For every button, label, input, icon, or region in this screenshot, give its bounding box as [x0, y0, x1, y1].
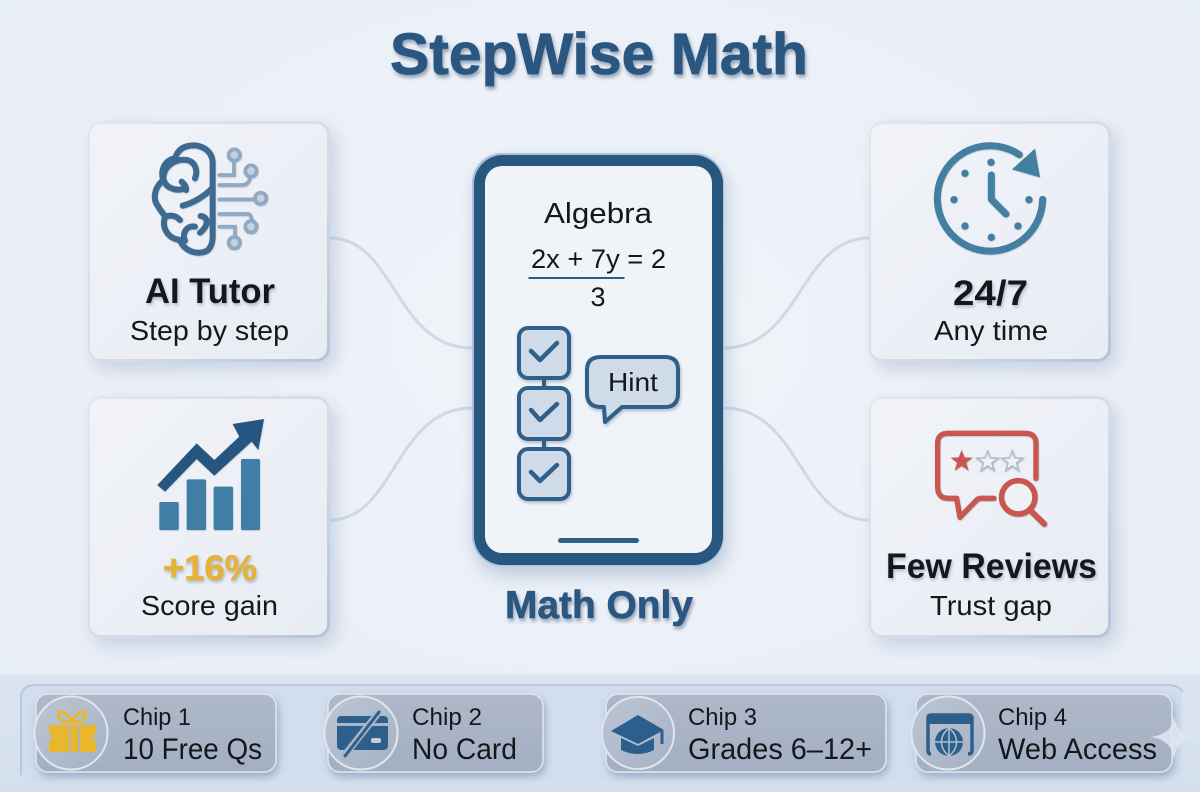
- home bar: [558, 538, 639, 543]
- heading: Few Reviews: Few Reviews: [886, 547, 1097, 586]
- title: StepWise Math: [390, 22, 808, 87]
- panel: AI Tutor: [88, 121, 330, 362]
- text: Step by step: Step by step: [130, 315, 289, 346]
- text: Chip 2: Chip 2: [412, 704, 482, 731]
- icon: review bubble with magnifier: [938, 433, 1044, 524]
- footer band: [0, 672, 1200, 792]
- callout: Hint: Hint: [608, 367, 659, 397]
- icon: graduation cap: [611, 715, 664, 754]
- stat: +16%: +16%: [163, 549, 257, 588]
- text: Chip 1: Chip 1: [123, 704, 191, 731]
- formula: 3: [590, 282, 606, 312]
- formula: [528, 244, 666, 312]
- text: 10 Free Qs: 10 Free Qs: [123, 733, 262, 766]
- label: Math Only: Math Only: [505, 584, 693, 627]
- chip 4: web access: [912, 694, 1172, 772]
- text: Trust gap: Trust gap: [930, 590, 1052, 621]
- heading: Algebra: Algebra: [544, 198, 653, 230]
- text: No Card: No Card: [412, 733, 517, 766]
- heading: AI Tutor: AI Tutor: [145, 272, 275, 311]
- icon: browser globe: [927, 714, 972, 756]
- connectors between feature cards and phone: [330, 238, 869, 520]
- text: Chip 4: Chip 4: [998, 704, 1067, 731]
- icon: crossed-out card: [337, 712, 388, 756]
- text: Web Access: Web Access: [998, 733, 1157, 766]
- chip 2: no card: [324, 694, 543, 772]
- icon: rising bar chart with arrow: [157, 419, 264, 530]
- chip 3: grades: [602, 694, 886, 772]
- callout: Hint: [587, 357, 678, 422]
- text: Chip 3: Chip 3: [688, 704, 757, 731]
- icon: sparkle: [1150, 716, 1198, 760]
- panel: 24/7: [869, 121, 1111, 362]
- text: Grades 6–12+: Grades 6–12+: [688, 733, 872, 766]
- panel: Score gain: [88, 396, 330, 638]
- text: Any time: Any time: [934, 315, 1048, 346]
- heading: 24/7: 24/7: [953, 274, 1028, 313]
- panel: Few Reviews: [869, 396, 1111, 638]
- chip 1: free questions: [34, 694, 276, 772]
- panel: phone: [472, 153, 724, 566]
- formula: 2x + 7y = 2: [531, 244, 666, 274]
- step checklist: [519, 328, 569, 499]
- icon: gift: [49, 712, 96, 752]
- text: Score gain: Score gain: [141, 590, 278, 621]
- icon: brain with circuit: [155, 145, 266, 253]
- icon: clock with arrow: [937, 146, 1043, 251]
